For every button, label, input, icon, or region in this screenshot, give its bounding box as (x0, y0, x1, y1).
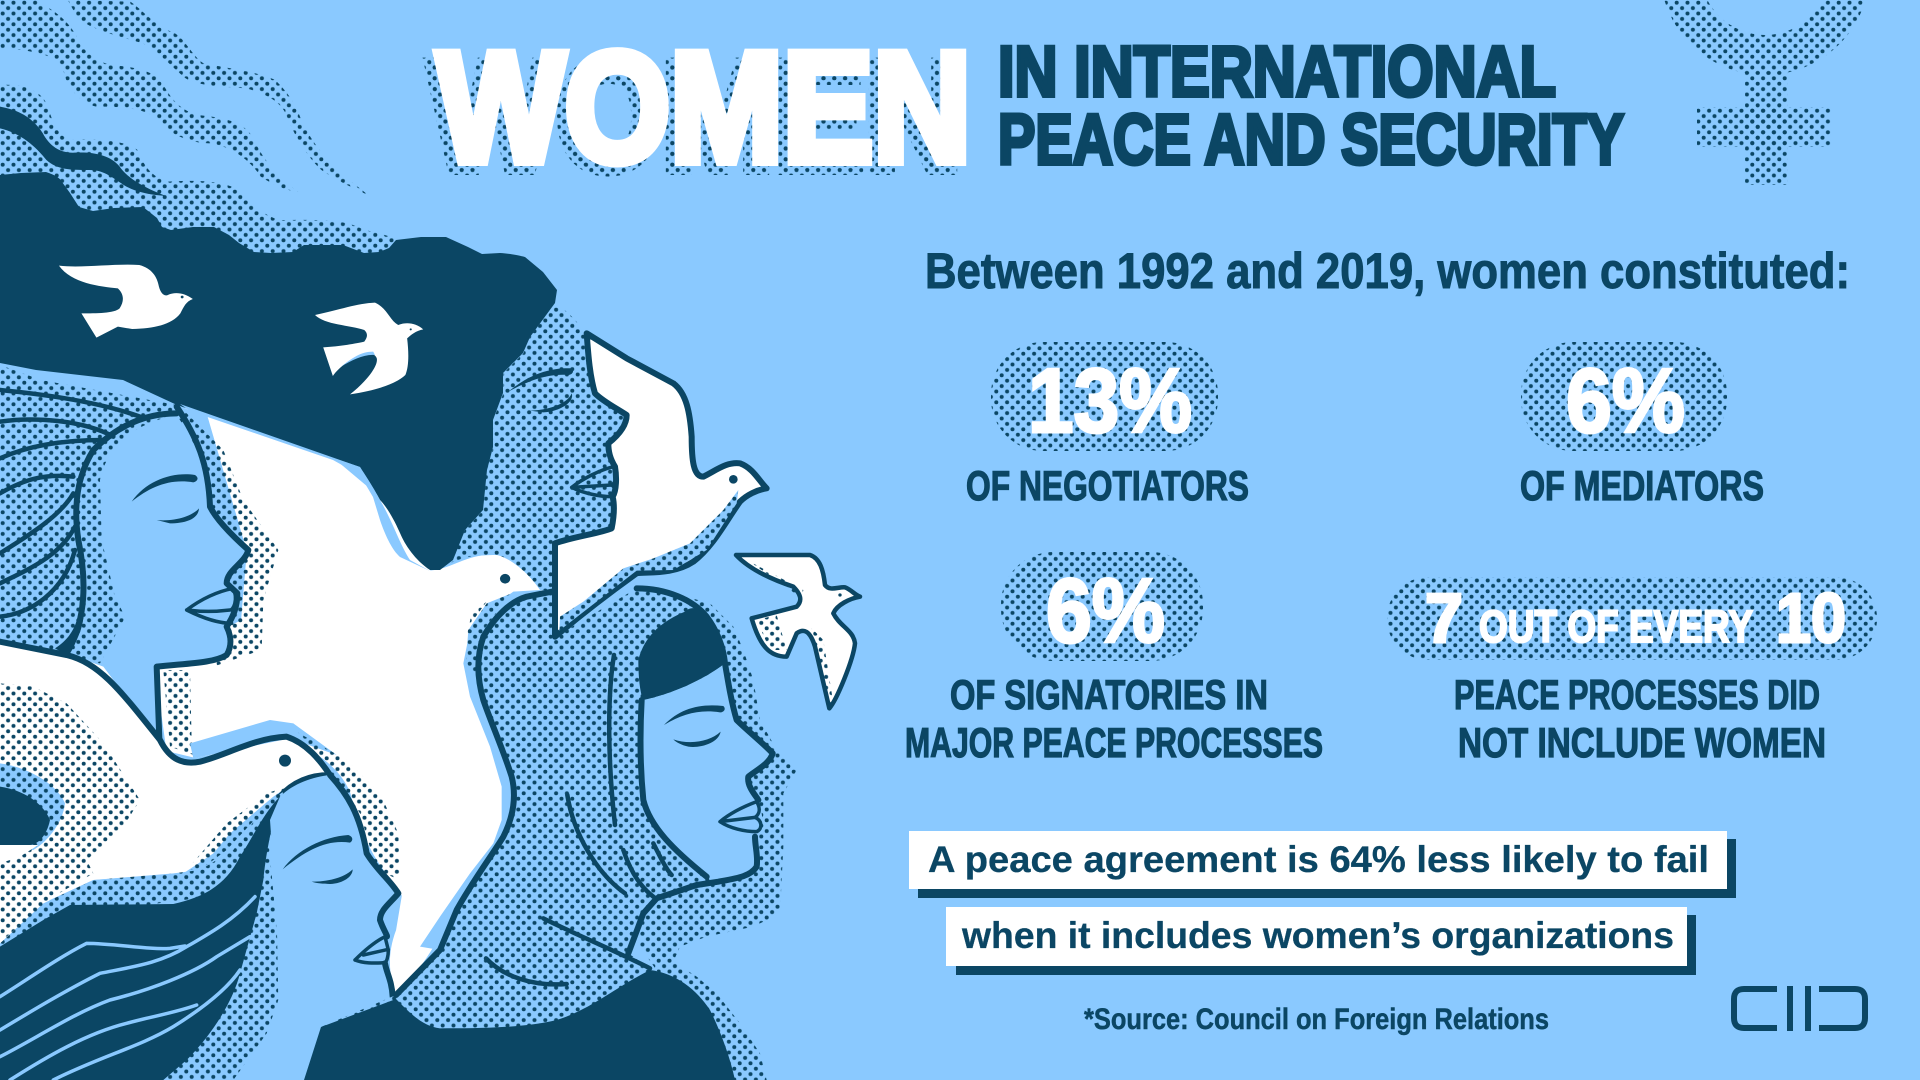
stat: 6% of signatories (905, 552, 1323, 766)
title (428, 21, 1624, 204)
callout line 2 text: when it includes women’s organizations (961, 915, 1674, 956)
callout line 1 text: A peace agreement is 64% less likely to fail (928, 839, 1709, 880)
callout line 2 shadow (956, 915, 1696, 975)
stat: 6% of mediators (1520, 342, 1764, 509)
light shadow under hair (180, 404, 430, 571)
stat: 13% of negotiators (966, 342, 1249, 509)
label: OF MEDIATORS (1520, 462, 1764, 509)
number: 6% (1566, 351, 1685, 452)
callout: peace agreement (909, 831, 1736, 975)
words: out of every: OUT OF EVERY (1479, 601, 1753, 652)
lower left woman: hair and face (0, 775, 398, 1080)
central white dove (155, 408, 546, 996)
title line 1: IN INTERNATIONAL (998, 33, 1556, 112)
pill (1521, 342, 1727, 451)
pill (1001, 552, 1203, 661)
number 7: 7 (1425, 579, 1463, 657)
illustration: women and doves (0, 0, 860, 1080)
number: 6% (1046, 561, 1165, 662)
number 10: 10 (1776, 579, 1846, 657)
label line 2: MAJOR PEACE PROCESSES (905, 719, 1323, 766)
halftone shading on central dove (163, 410, 278, 757)
upper right white dove (555, 333, 767, 637)
woman 3: hijab (304, 588, 797, 1080)
big dark hair (0, 172, 557, 570)
woman 1: top face (450, 303, 627, 590)
icon: dove in hair, right (315, 303, 423, 394)
title shadow: WOMEN (428, 30, 962, 204)
woman 2: left face and hair (0, 365, 248, 738)
label: OF NEGOTIATORS (966, 462, 1249, 509)
pill (1387, 577, 1877, 660)
number: 13% (1028, 351, 1192, 452)
source note: *Source: Council on Foreign Relations (1084, 1003, 1549, 1036)
callout line 1 shadow (918, 839, 1736, 898)
stat: 7 out of every 10 (1387, 577, 1877, 766)
halftone hair waves (0, 0, 396, 260)
logo: CIID (1734, 986, 1865, 1031)
title word: WOMEN: WOMEN (437, 21, 971, 195)
label line 1: OF SIGNATORIES IN (950, 671, 1268, 718)
title line 2: PEACE AND SECURITY (998, 101, 1624, 180)
icon: outlined flying dove (736, 555, 860, 708)
callout line 1 box (909, 831, 1727, 889)
icon: dove in hair, left (59, 265, 193, 338)
callout line 2 box (946, 907, 1687, 966)
lower left white dove (0, 642, 400, 947)
pill (991, 342, 1218, 451)
label line 2: NOT INCLUDE WOMEN (1458, 719, 1826, 766)
icon: female symbol (1660, 0, 1870, 185)
